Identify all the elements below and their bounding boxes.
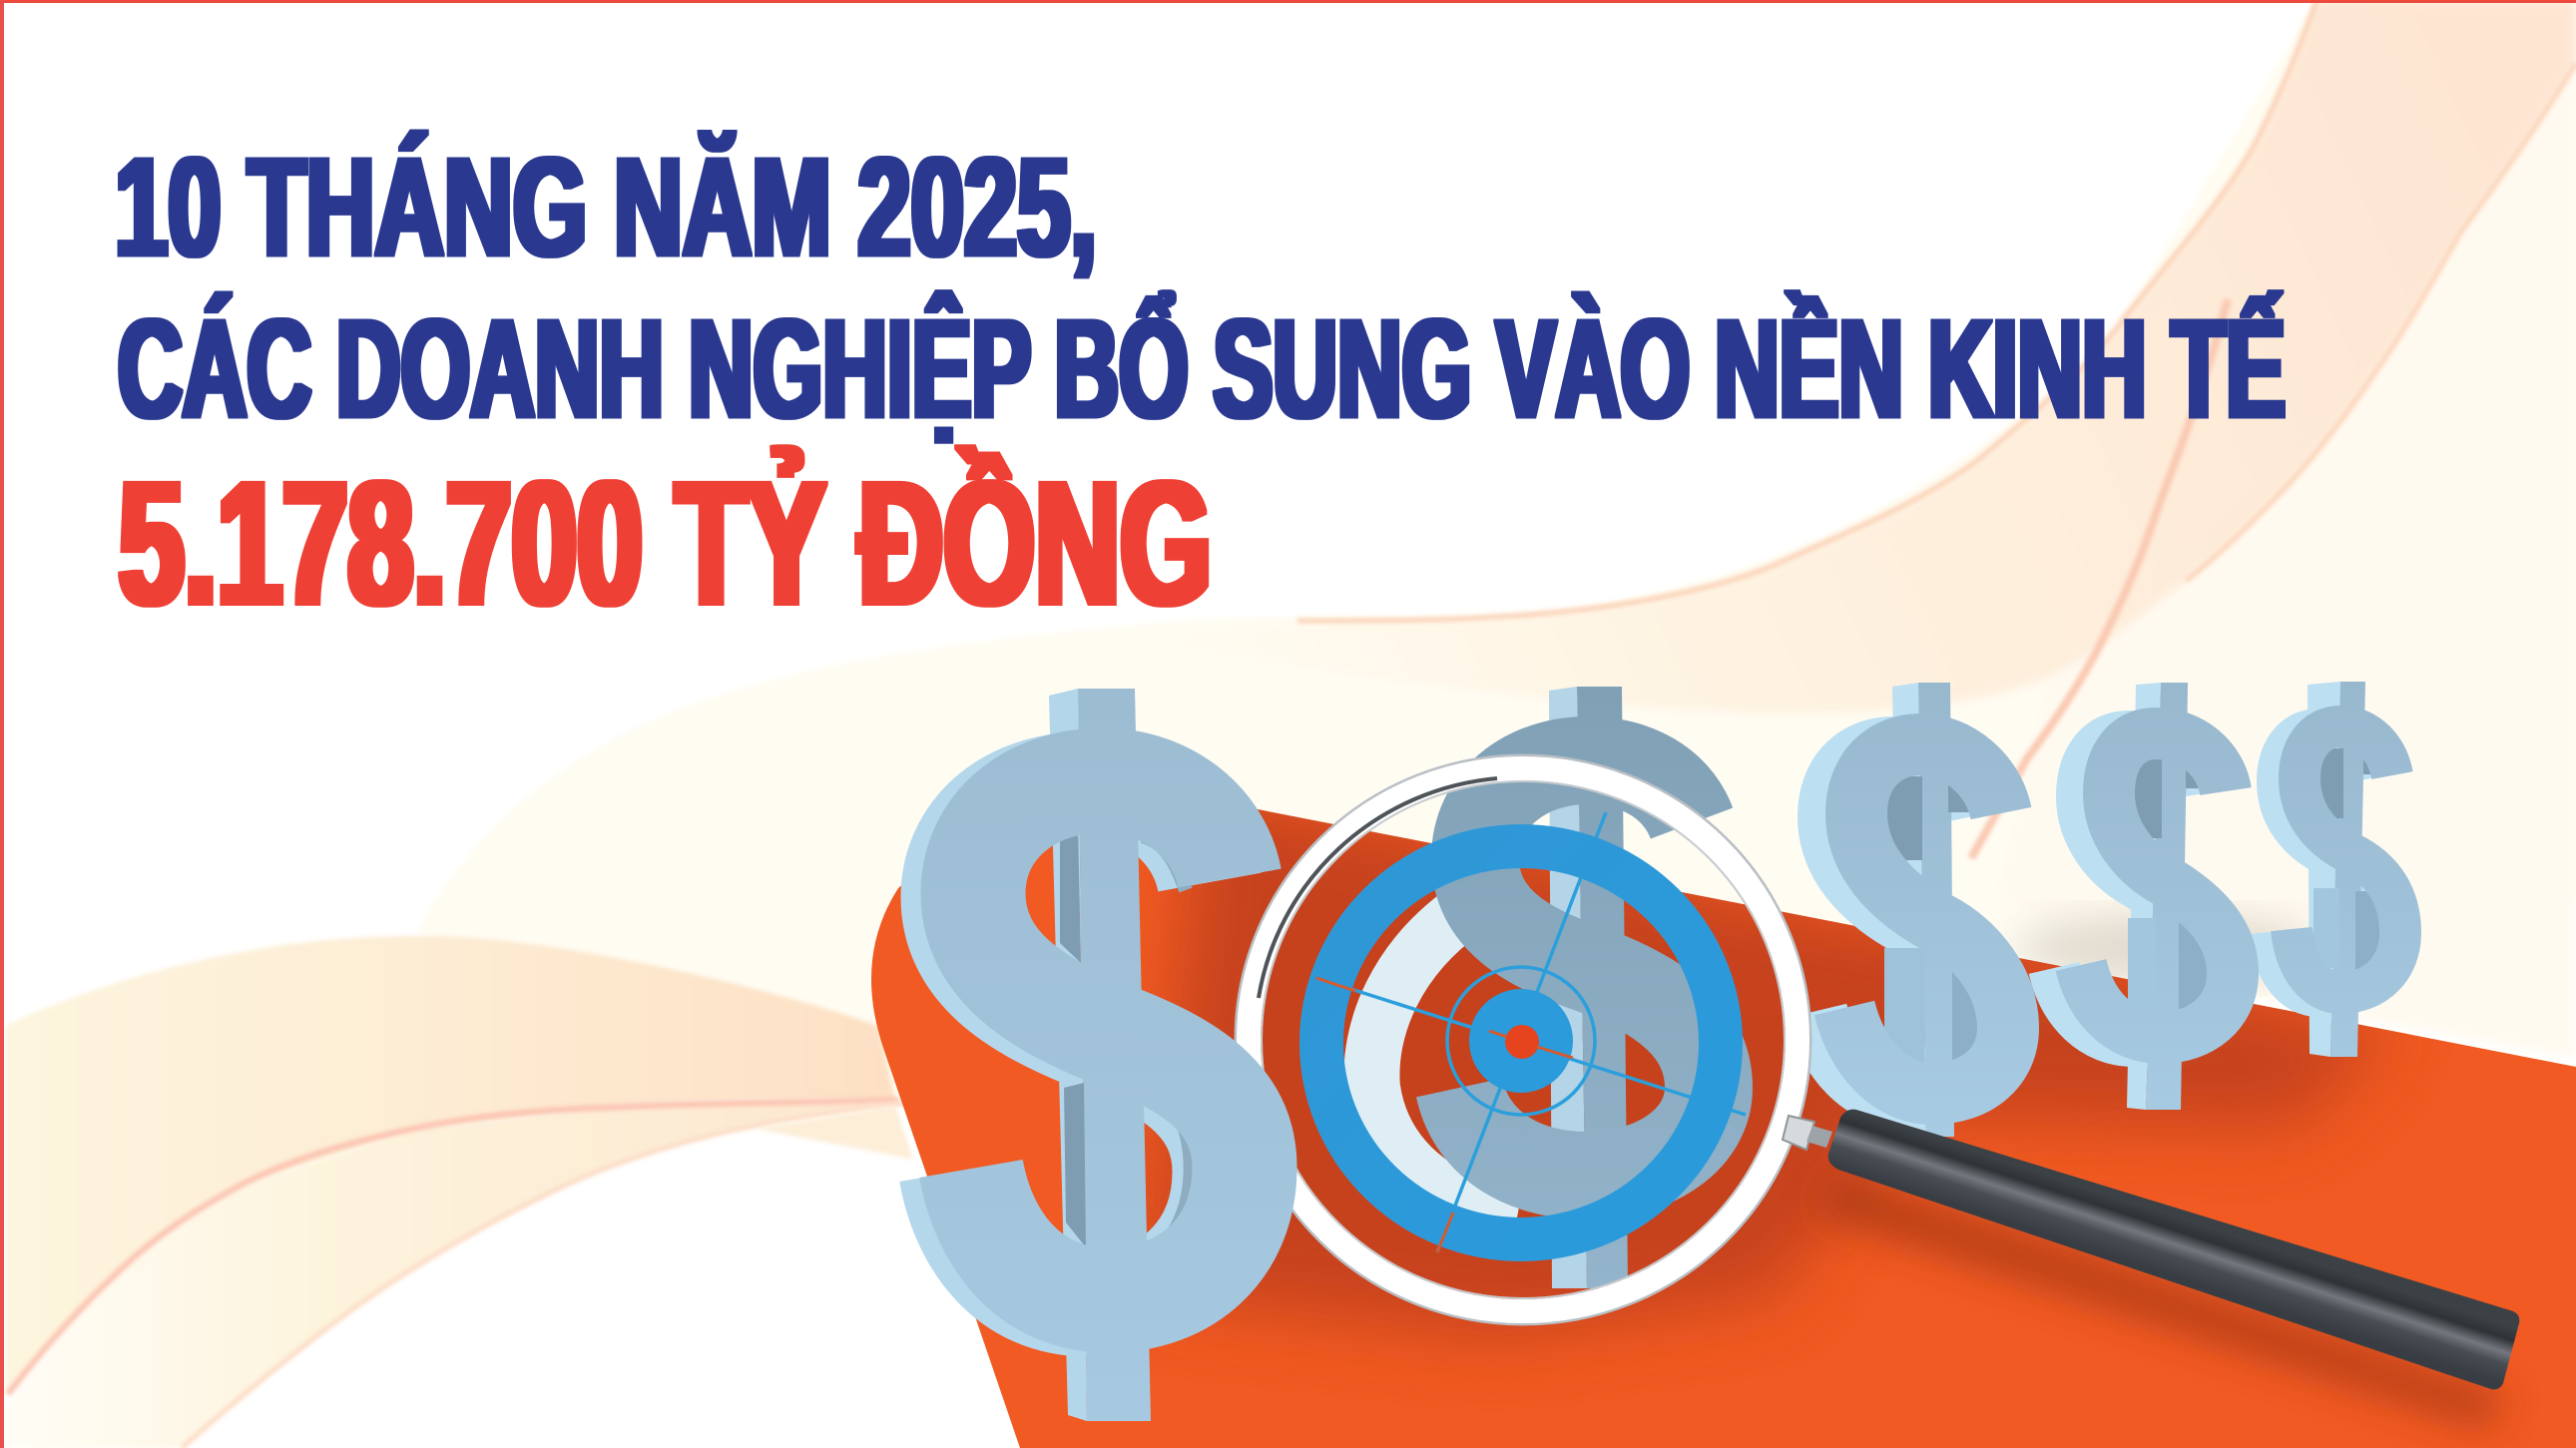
counter shading — [1060, 823, 1081, 963]
target bullseye — [1505, 1025, 1539, 1059]
icon: dollar sign 5 — [2270, 682, 2400, 1057]
crosshair accents — [1316, 978, 1573, 1252]
swoosh: faint cream sweep across the middle — [417, 0, 2576, 1103]
title line 3: highlighted figure: 5.178.700 TỶ ĐỒNG — [119, 445, 1212, 642]
swoosh: left lower edge — [182, 1103, 907, 1448]
swoosh: right cream area fading to white — [1996, 63, 2576, 1058]
crosshair lines — [1316, 812, 1746, 1252]
magnifying glass handle — [1828, 1110, 2519, 1389]
counter shading — [2314, 748, 2381, 969]
pale arc seen through the lens — [1371, 910, 1517, 1217]
icon: dollar sign 2 behind lens — [1459, 687, 1709, 1288]
magnifying glass lens — [1236, 755, 1810, 1324]
icon: dollar sign 3 — [1816, 683, 2008, 1137]
lens rim — [1236, 755, 1810, 1324]
swoosh: upper right peach band — [1098, 0, 2576, 713]
swoosh: pink crossing line — [1971, 299, 2228, 858]
swoosh: left pink line — [8, 1100, 898, 1394]
orange panel — [871, 768, 2576, 1448]
swoosh: left lower cream band — [6, 1101, 907, 1448]
swoosh: orange upper edge — [1297, 2, 2317, 621]
magnifying glass connector — [1783, 1116, 1832, 1150]
swoosh: left peach band — [6, 936, 895, 1396]
swoosh: small tail near panel — [756, 1106, 913, 1160]
target outer ring — [1321, 846, 1721, 1239]
icon: dollar sign 4 — [2054, 683, 2233, 1110]
counter shading — [1882, 776, 1984, 1065]
thin inner ring — [1447, 967, 1595, 1115]
title — [115, 128, 2286, 642]
counter shading — [2128, 758, 2213, 1010]
swoosh: pink inner edge — [2186, 63, 2576, 581]
panel shadows — [1148, 788, 2505, 1427]
icon: dollar sign 1 large foreground — [951, 689, 1245, 1421]
title line 1: 10 THÁNG NĂM 2025, — [115, 128, 1097, 285]
target centre disc — [1469, 989, 1573, 1093]
shadow behind far dollars — [2016, 914, 2316, 982]
